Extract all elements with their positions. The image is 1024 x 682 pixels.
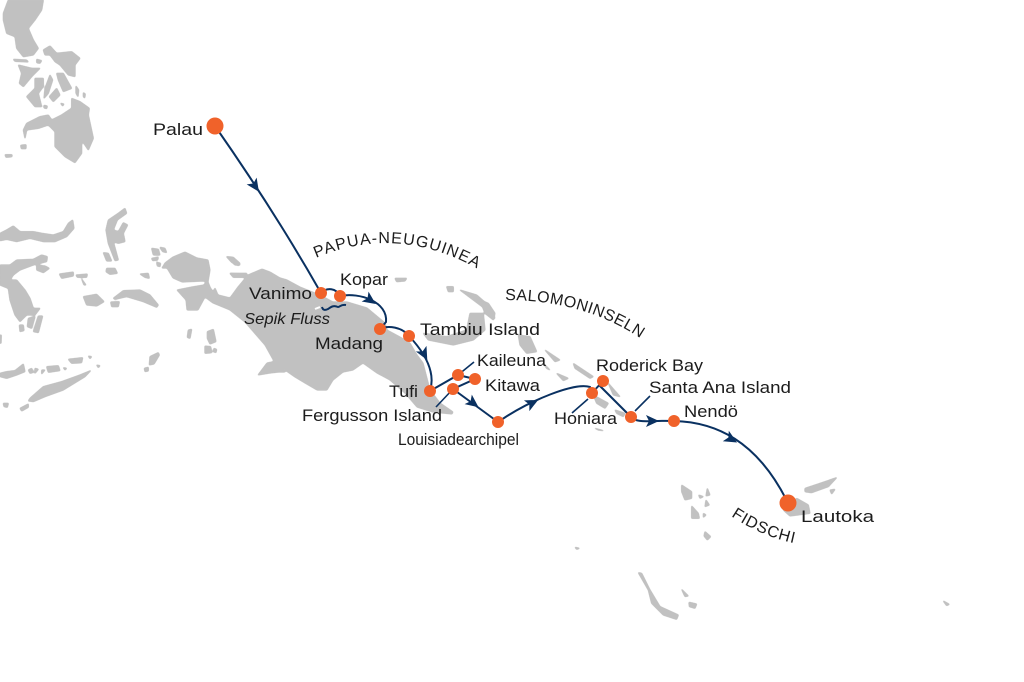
label: Lautoka: Lautoka [801,507,875,526]
region label: Fidschi: FIDSCHI [732,508,795,543]
label: Kitawa: Kitawa [485,376,541,395]
label: Honiara: Honiara [554,409,618,428]
label: Palau: Palau [153,120,203,139]
label: Santa Ana Island: Santa Ana Island [649,378,791,397]
leader lines [436,362,650,413]
label: Madang: Madang [315,334,383,353]
region label: Salomoninseln: SALOMONINSELN [506,288,646,338]
landmass: Philippines [3,0,93,163]
route arrows [247,178,740,448]
label: Vanimo: Vanimo [249,284,312,303]
label: Kopar: Kopar [340,270,388,289]
river: Sepik [315,305,346,310]
landmass: Bismarck archipelago [227,257,495,345]
label: Tufi: Tufi [389,382,418,401]
label: Tambiu Island: Tambiu Island [420,320,540,339]
label: Nendö: Nendö [684,402,738,421]
route line [215,126,788,503]
landmass: Vanuatu, New Caledonia and Fiji [575,478,949,619]
port markers [206,118,796,512]
label: Fergusson Island: Fergusson Island [302,406,442,425]
label: Louisiadearchipel: Louisiadearchipel [398,430,519,449]
region label: Papua-Neuguinea: PAPUA-NEUGUINEA [313,232,478,268]
label: Roderick Bay: Roderick Bay [596,356,704,375]
label: Kaileuna: Kaileuna [477,351,547,370]
landmass: Solomon Islands [480,300,625,431]
landmass: New Guinea [162,252,453,414]
landmass: Indonesia islands [0,208,247,411]
label: Sepik Fluss: Sepik Fluss [244,311,330,328]
